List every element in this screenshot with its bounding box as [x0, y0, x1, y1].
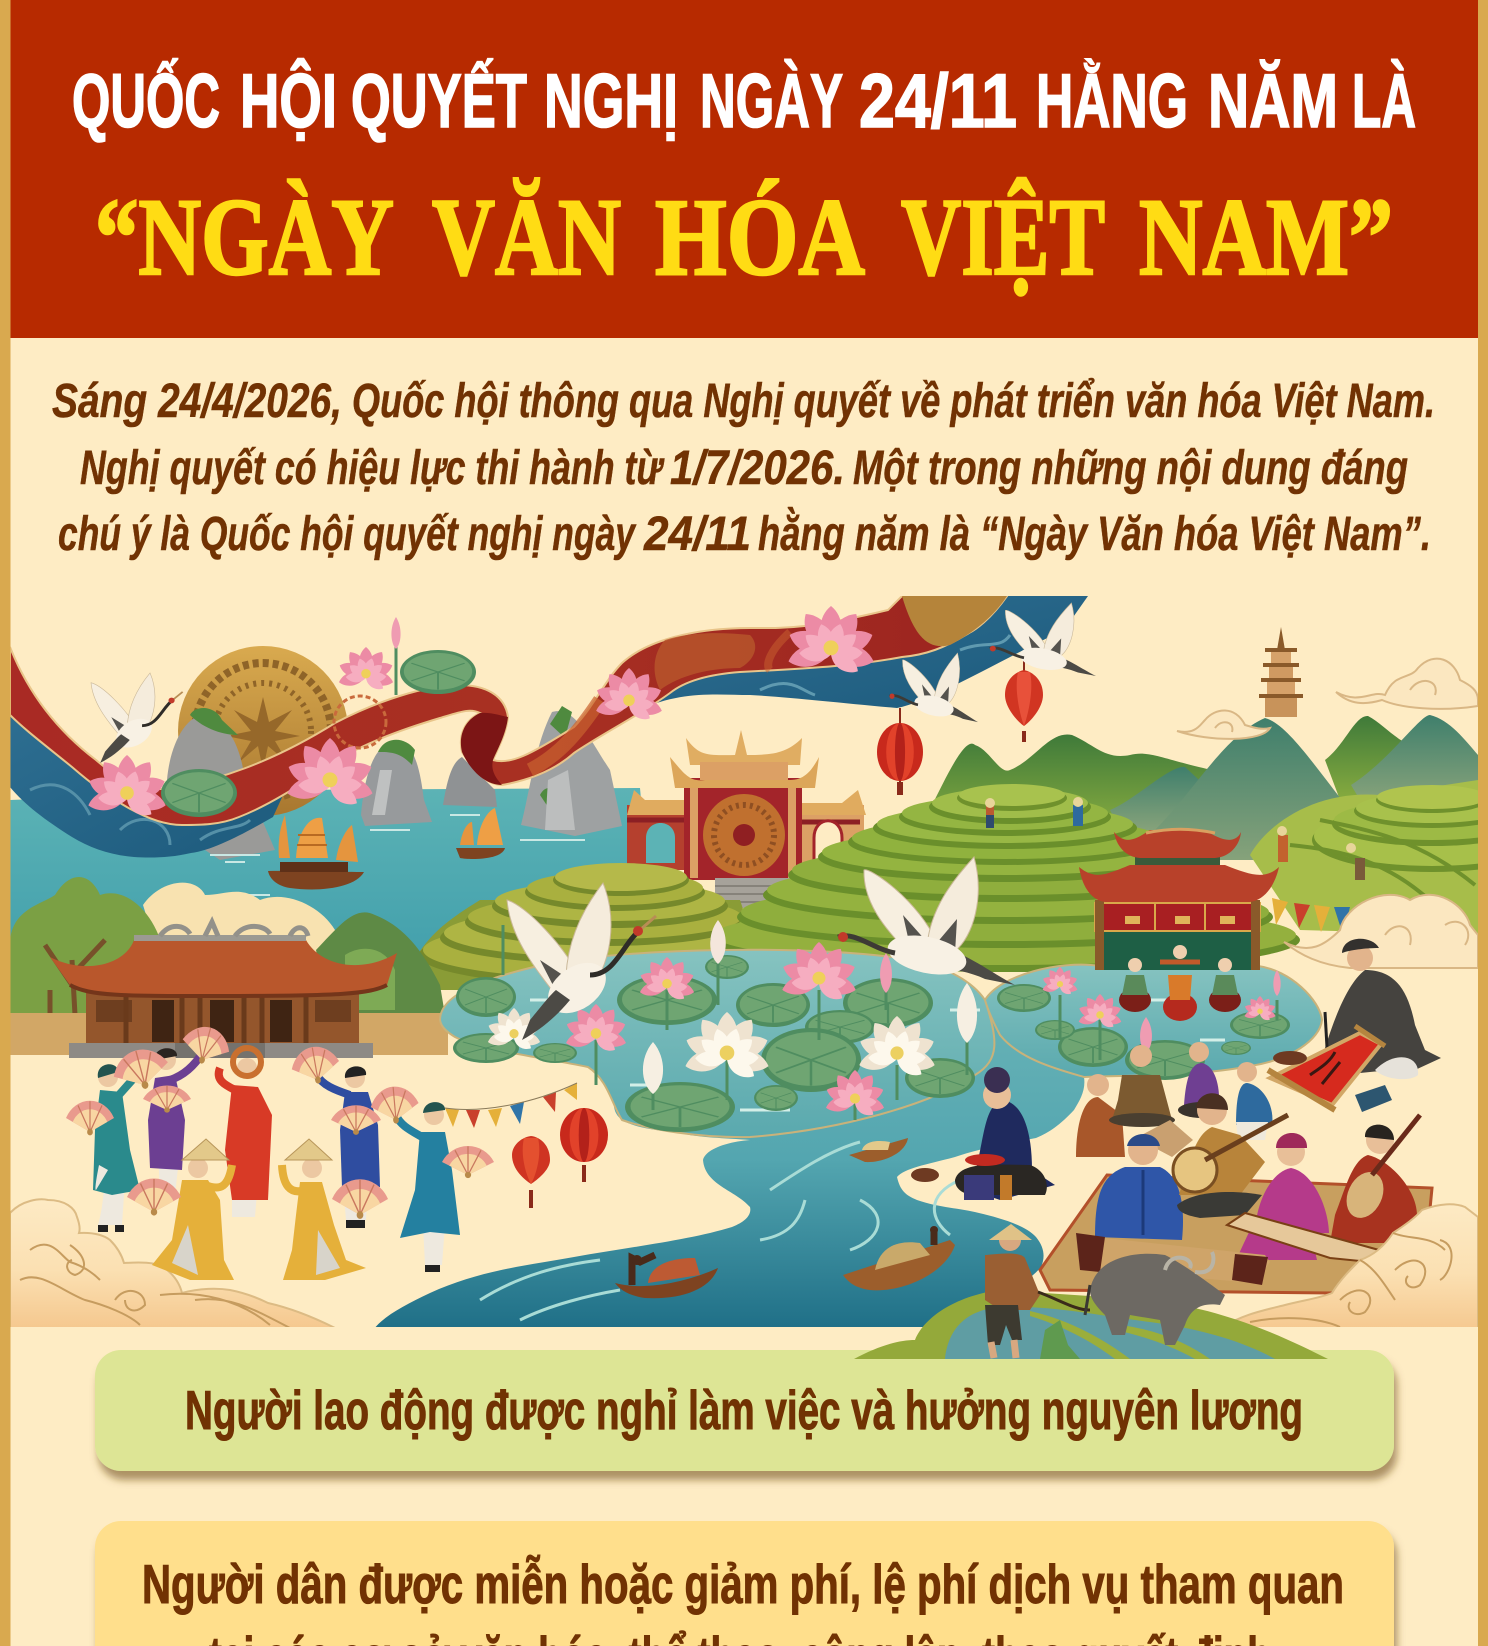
flowing ribbon	[10, 596, 1088, 858]
lily pads	[453, 955, 1290, 1132]
dancer: blue	[317, 1066, 380, 1228]
title line 2: NAM”	[1139, 176, 1393, 298]
gate temple	[627, 730, 866, 908]
title line 1: NGÀY	[700, 59, 843, 144]
illustration: Vietnamese culture panorama	[10, 596, 1488, 1359]
calligrapher	[1268, 939, 1441, 1112]
title line 1: QUỐC	[72, 59, 220, 144]
dancer: yellow left	[152, 1139, 234, 1280]
dancer: red	[219, 1048, 272, 1217]
intro paragraph	[52, 375, 1435, 561]
panel: green card	[95, 1350, 1394, 1471]
sea ripples	[210, 815, 585, 895]
intro paragraph: chú ý là Quốc hội quyết nghị ngày	[58, 508, 637, 561]
title line 2: VĂN	[432, 176, 621, 298]
water: pond and river	[373, 950, 1322, 1330]
intro paragraph: 24/11	[643, 508, 751, 561]
hill terraces: left	[420, 863, 743, 990]
cloud: right	[1284, 895, 1478, 968]
hill terraces: back right	[1250, 780, 1488, 935]
bunting: left	[445, 1083, 577, 1128]
title line 1: NĂM	[1208, 59, 1338, 144]
water buffalo	[1085, 1252, 1225, 1345]
dancers	[66, 1021, 494, 1280]
cloud behind temple	[143, 883, 335, 960]
dancer: purple	[148, 1048, 203, 1195]
side border: left	[0, 0, 10, 1646]
water puppets	[1119, 945, 1241, 1021]
hand fans	[66, 1021, 494, 1219]
farmer	[985, 1224, 1090, 1358]
title line 1: NGHỊ	[544, 59, 678, 144]
title line 2: HÓA	[655, 176, 865, 298]
sea	[10, 788, 641, 952]
title line 1: LÀ	[1352, 59, 1416, 144]
cloud: bottom left	[10, 1199, 335, 1328]
title line 2: “NGÀY	[95, 176, 394, 298]
mountains	[931, 715, 1478, 860]
bronze drum	[178, 646, 348, 816]
hill terraces: big center	[700, 784, 1300, 972]
title line 1: HỘI	[240, 59, 337, 144]
intro paragraph: Sáng 24/4/2026,	[52, 375, 342, 428]
ribbon lotuses and leaves	[86, 606, 876, 821]
junk boats	[268, 808, 505, 889]
title line 1: HẰNG	[1036, 59, 1188, 144]
communal house temple	[10, 922, 448, 1058]
lanterns on the shore	[512, 1108, 608, 1208]
pagoda tower	[1259, 627, 1303, 717]
dancer: yellow right	[282, 1139, 366, 1280]
seated ethnic woman	[911, 1067, 1055, 1200]
intro paragraph: Nghị quyết có hiệu lực thi hành từ	[80, 442, 665, 495]
title line 1	[72, 59, 1416, 144]
seated villagers and chess game	[1076, 1042, 1272, 1157]
dancer: teal dress right	[396, 1102, 460, 1272]
rice paddy terrace with farmer and buffalo	[854, 1224, 1328, 1359]
river boats	[615, 1138, 955, 1298]
intro paragraph: 1/7/2026.	[670, 442, 845, 495]
panel: orange card	[95, 1521, 1394, 1646]
header band	[10, 0, 1478, 338]
karst rocks	[160, 706, 622, 860]
bunting: right	[1272, 898, 1350, 932]
cloud: top right	[1177, 659, 1478, 739]
trees	[10, 877, 445, 1015]
cloud: bottom right	[1222, 1204, 1478, 1330]
title line 1: 24/11	[859, 59, 1017, 144]
rice farmers on terraces	[985, 797, 1365, 880]
mat	[1040, 1175, 1432, 1293]
side border: right	[1478, 0, 1488, 1646]
title line 2: VIỆT	[901, 176, 1105, 298]
title line 1: QUYẾT	[351, 59, 527, 144]
lotus stems and flowers in ponds	[486, 920, 1281, 1120]
cranes	[91, 603, 1096, 1040]
hanging lanterns	[877, 660, 1043, 795]
water puppet stage	[1079, 829, 1279, 970]
dancer: teal dress left	[93, 1064, 143, 1232]
musicians	[1076, 1093, 1420, 1285]
title line 2	[95, 176, 1393, 298]
